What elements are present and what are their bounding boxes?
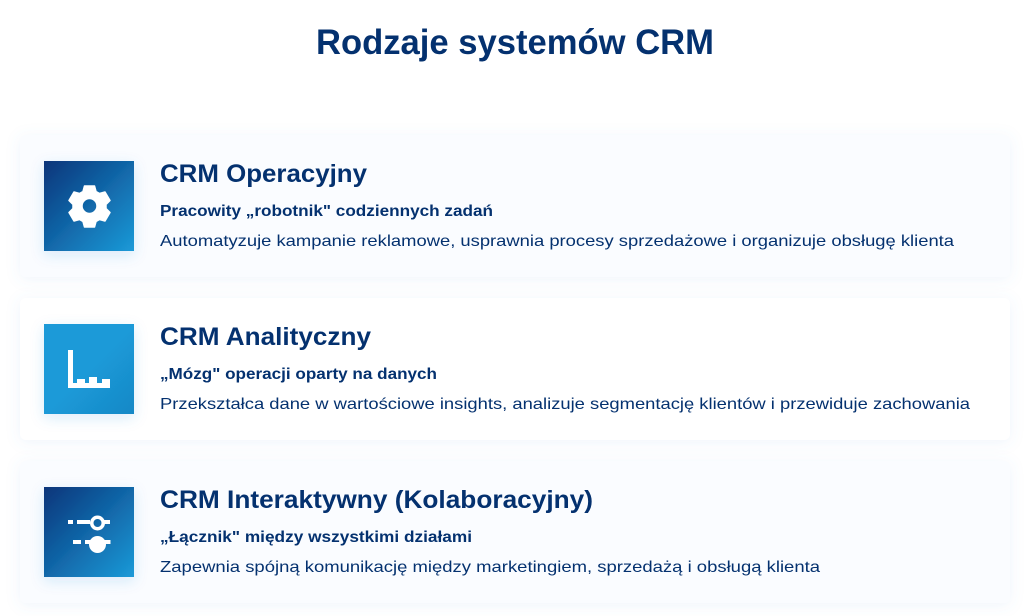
panel: CRM Interaktywny — [20, 461, 1010, 603]
heading: CRM Analityczny — [160, 323, 371, 351]
description: Przekształca dane w wartościowe insights, analizuje segmentację klientów i przewiduje zachowania — [160, 396, 970, 413]
subtitle: „Mózg" operacji oparty na danych — [160, 366, 437, 383]
panel: CRM Analityczny — [20, 298, 1010, 440]
heading: CRM Interaktywny (Kolaboracyjny) — [160, 486, 593, 514]
icon: sliders — [44, 487, 134, 577]
subtitle: „Łącznik" między wszystkimi działami — [160, 529, 472, 546]
panel: CRM Operacyjny — [20, 135, 1010, 277]
heading: CRM Operacyjny — [160, 160, 367, 188]
icon: bar chart — [44, 324, 134, 414]
description: Automatyzuje kampanie reklamowe, usprawnia procesy sprzedażowe i organizuje obsługę klienta — [160, 233, 954, 250]
title: Rodzaje systemów CRM — [316, 23, 714, 62]
icon: gear — [44, 161, 134, 251]
subtitle: Pracowity „robotnik" codziennych zadań — [160, 203, 493, 220]
description: Zapewnia spójną komunikację między marketingiem, sprzedażą i obsługą klienta — [160, 559, 820, 576]
